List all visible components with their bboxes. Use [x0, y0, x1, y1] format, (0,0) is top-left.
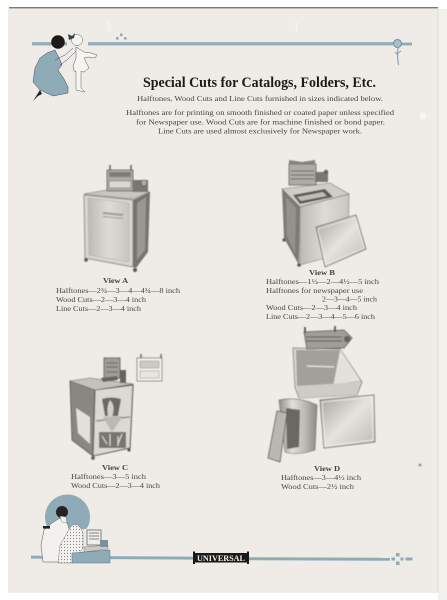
view D caption: View D	[314, 464, 340, 473]
intro text: Halftones, Wood Cuts and Line Cuts furnished in sizes indicated below.	[137, 95, 383, 103]
title: Special Cuts for Catalogs, Folders, Etc.	[143, 75, 376, 91]
intro text: Line Cuts are used almost exclusively for Newspaper work.	[158, 128, 362, 136]
view B caption: 2—3—4—5 inch	[322, 294, 377, 304]
intro text: for Newspaper use. Wood Cuts are for machine finished or bond paper.	[136, 118, 385, 126]
view D caption: Wood Cuts—2½ inch	[281, 482, 354, 491]
icon: flower	[394, 40, 402, 65]
view B caption: Wood Cuts—2—3—4 inch	[266, 303, 357, 312]
view A caption: View A	[103, 276, 129, 285]
view B caption: Halftones—1½—2—4½—5 inch	[266, 277, 379, 286]
bottom ornamental rule	[31, 553, 412, 565]
intro text	[126, 95, 394, 136]
top ornamental rule	[32, 34, 412, 45]
view C caption: Wood Cuts—2—3—4 inch	[71, 481, 160, 490]
illustration: woman at washer	[41, 494, 110, 563]
illustration: view B washer	[282, 160, 366, 267]
illustration: view C washer	[70, 354, 162, 460]
illustration: mother and child	[33, 33, 97, 101]
intro text: Halftones are for printing on smooth finished or coated paper unless specified	[126, 109, 394, 117]
logo plate: UNIVERSAL: UNIVERSAL	[197, 554, 245, 563]
view A caption: Halftones—2¾—3—4—4¾—8 inch	[56, 286, 180, 295]
view D caption: Halftones—3—4½ inch	[281, 473, 361, 482]
illustration: view A washer	[84, 165, 150, 272]
view A caption	[56, 276, 180, 313]
view A caption: Wood Cuts—2—3—4 inch	[56, 295, 146, 304]
view B caption	[266, 268, 379, 321]
view B caption: View B	[309, 268, 335, 277]
view C caption: Halftones—3—5 inch	[71, 472, 146, 481]
view A caption: Line Cuts—2—3—4 inch	[56, 304, 141, 313]
illustration: view D washer parts	[268, 326, 375, 462]
view B caption: Halftones for newspaper use	[266, 286, 364, 295]
view D caption	[281, 464, 361, 491]
view B caption: Line Cuts—2—3—4—5—6 inch	[266, 312, 375, 321]
logo plate: UNIVERSAL	[193, 552, 249, 564]
view C caption	[71, 463, 160, 490]
view C caption: View C	[102, 463, 128, 472]
